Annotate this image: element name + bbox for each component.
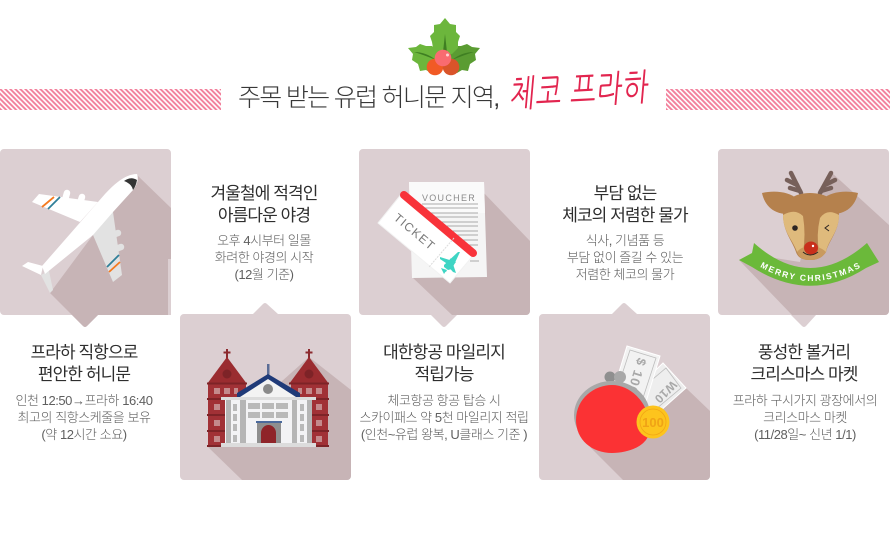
text: direct flight: 최고의 직항스케줄을 보유 (18, 410, 151, 425)
icon: purse (574, 371, 650, 453)
text: direct flight: 편안한 허니문 (38, 365, 130, 384)
shadow: plane (50, 175, 171, 327)
icon: banknotes: W10 (651, 378, 680, 406)
icon: airplane (22, 174, 138, 293)
text: christmas market: 프라하 구시가지 광장에서의 (733, 393, 877, 408)
text: night view: 화려한 야경의 시작 (215, 250, 314, 265)
text: christmas market (733, 343, 877, 442)
text: direct flight (16, 343, 153, 442)
text: mileage: 대한항공 마일리지 (383, 343, 505, 362)
title accent: handwritten Prague: 체코 프라하 (508, 65, 651, 115)
icon: coin (636, 406, 670, 438)
text: prices: 체코의 저렴한 물가 (562, 206, 689, 225)
text: christmas market: 크리스마스 마켓 (750, 365, 858, 384)
shadow: purse (590, 388, 710, 480)
shadow: ticket (412, 192, 530, 315)
text: mileage: 적립가능 (415, 365, 474, 384)
text: night view: (12월 기준) (234, 267, 294, 282)
text: mileage: 체코항공 항공 탑승 시 (387, 393, 501, 408)
text: prices: 부담 없이 즐길 수 있는 (567, 250, 684, 265)
icon: voucher: VOUCHER (422, 193, 476, 203)
icon: banknotes (612, 346, 686, 420)
text: prices (562, 184, 689, 282)
decorative band: right stripes (666, 89, 890, 110)
shadow: church (208, 357, 351, 480)
icon: banknotes: $ 100 (624, 356, 649, 396)
text: christmas market: 크리스마스 마켓 (763, 410, 847, 425)
text: prices: 저렴한 체코의 물가 (576, 267, 675, 282)
icon: voucher (409, 182, 487, 278)
text: direct flight: (약 12시간 소요) (41, 427, 127, 442)
panel: mileage (359, 149, 530, 327)
icon: reindeer (762, 173, 858, 260)
icon: ribbon (739, 243, 879, 286)
panel: night view (180, 303, 351, 480)
decorative band: left stripes (0, 89, 221, 110)
shadow: reindeer (739, 172, 889, 315)
text: direct flight: 프라하 직항으로 (30, 343, 138, 362)
text: mileage (359, 343, 529, 442)
text: mileage: 스카이패스 약 5천 마일리지 적립 (359, 410, 529, 425)
icon: church (207, 349, 329, 447)
text: christmas market: 풍성한 볼거리 (758, 343, 850, 362)
text: direct flight: 인천 12:50→프라하 16:40 (16, 393, 153, 408)
text: prices: 식사, 기념품 등 (586, 233, 665, 248)
text: mileage: (인천~유럽 왕복, U클래스 기준 ) (361, 427, 527, 442)
panel: christmas market (718, 149, 889, 327)
icon: holly (408, 18, 480, 75)
panel: prices (539, 303, 710, 480)
text: christmas market: (11/28일~ 신년 1/1) (754, 427, 856, 442)
text: night view: 아름다운 야경 (218, 206, 310, 225)
icon: coin: 100 (642, 415, 664, 430)
icon: ticket: TICKET (391, 211, 438, 253)
title: 주목 받는 유럽 허니문 지역, (238, 84, 499, 112)
panel: direct flight (0, 149, 171, 327)
text: prices: 부담 없는 (594, 184, 657, 203)
icon: ribbon: MERRY CHRISTMAS (760, 262, 860, 281)
text: night view: 오후 4시부터 일몰 (217, 233, 311, 248)
text: night view: 겨울철에 적격인 (210, 184, 318, 203)
icon: ticket (378, 192, 476, 283)
text: night view (210, 184, 318, 282)
